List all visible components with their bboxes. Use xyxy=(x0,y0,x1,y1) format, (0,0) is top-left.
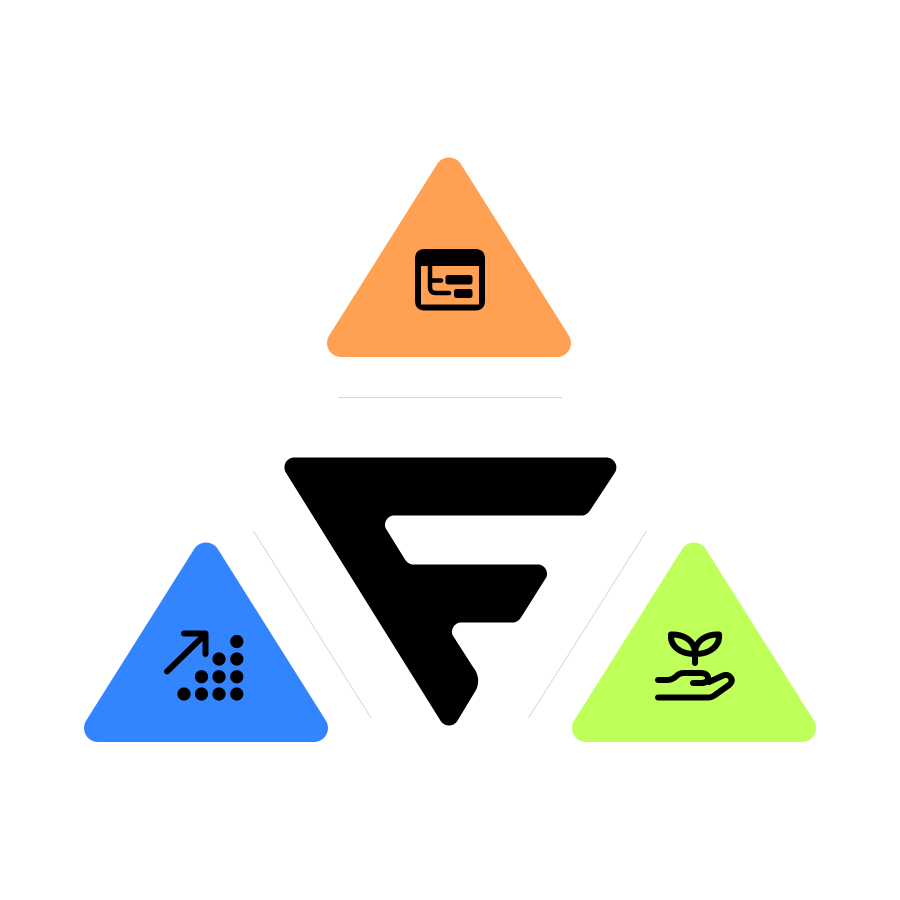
icon: growth arrow with dots xyxy=(167,634,243,701)
central F logo xyxy=(284,458,616,726)
icon: layout table xyxy=(415,249,485,310)
panel: green triangle xyxy=(572,543,816,742)
panel: orange triangle xyxy=(327,158,571,357)
panel: blue triangle xyxy=(84,543,328,742)
icon: plant in hand xyxy=(658,634,732,698)
